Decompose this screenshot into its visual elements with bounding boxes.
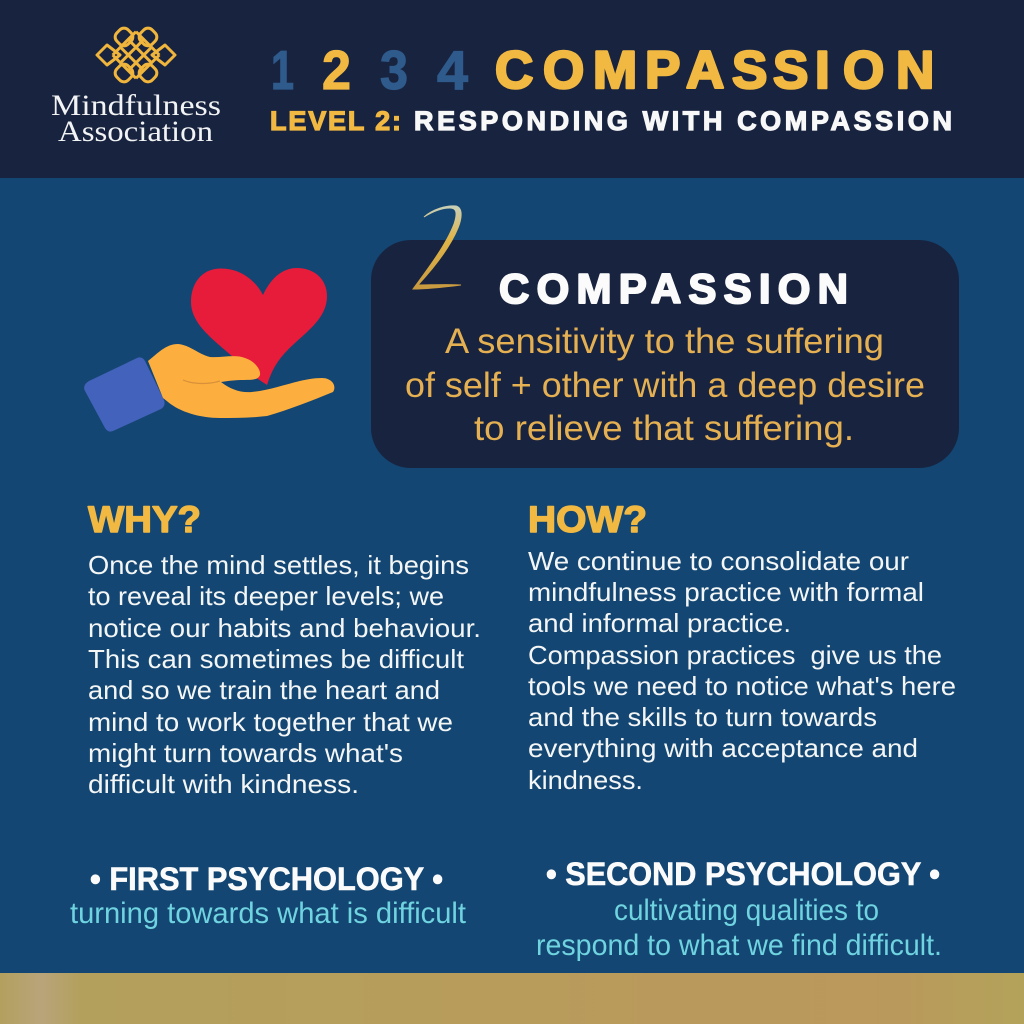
text block: why: notice our habits and behaviour. — [88, 613, 481, 643]
text block: how: and the skills to turn towards — [528, 702, 877, 732]
text block: how: kindness. — [528, 765, 643, 795]
text block: why: might turn towards what's — [88, 738, 403, 768]
text block: how: everything with acceptance and — [528, 733, 918, 763]
level numbers — [271, 39, 468, 101]
bottom band — [0, 973, 1024, 1024]
definition text: to relieve that suffering. — [474, 409, 854, 448]
illustration: hand holding heart — [84, 268, 334, 432]
callout: second psychology: cultivating qualities to — [614, 894, 879, 927]
logo wordmark — [51, 89, 221, 148]
text block: how: mindfulness practice with formal — [528, 577, 924, 607]
definition text: of self + other with a deep desire — [405, 366, 925, 405]
text block: how: and informal practice. — [528, 608, 791, 638]
text block: why: difficult with kindness. — [88, 769, 359, 799]
text block: how: tools we need to notice what's here — [528, 671, 956, 701]
callout: first psychology — [70, 861, 467, 930]
text block: why: Once the mind settles, it begins — [88, 550, 469, 580]
level numbers: 2 — [322, 39, 351, 101]
callout: second psychology: respond to what we find difficult. — [536, 929, 942, 962]
heading: why: WHY? — [88, 499, 201, 540]
callout: first psychology: turning towards what is difficult — [70, 897, 467, 930]
callout: second psychology: • SECOND PSYCHOLOGY • — [546, 856, 940, 892]
icon: script numeral 2 — [413, 206, 461, 289]
definition text: A sensitivity to the suffering — [445, 322, 884, 361]
text block: why: to reveal its deeper levels; we — [88, 581, 444, 611]
text block: how — [528, 546, 956, 795]
level numbers: 4 — [437, 39, 468, 101]
panel: compassion definition — [371, 206, 959, 468]
title: COMPASSION — [495, 41, 934, 100]
icon: open hand — [148, 344, 334, 418]
icon: heart — [191, 268, 327, 385]
level numbers: 1 — [271, 39, 294, 101]
text block: why: mind to work together that we — [88, 707, 453, 737]
level numbers: 3 — [380, 39, 408, 101]
text block: why — [88, 550, 481, 799]
text block: why: and so we train the heart and — [88, 675, 440, 705]
text block: how: We continue to consolidate our — [528, 546, 909, 576]
header band — [0, 0, 1024, 178]
icon: endless knot — [97, 26, 175, 84]
callout: first psychology: • FIRST PSYCHOLOGY • — [90, 861, 443, 897]
logo wordmark: Mindfulness — [51, 89, 221, 122]
text block: why: This can sometimes be difficult — [88, 644, 465, 674]
logo wordmark: Association — [58, 115, 213, 148]
callout: second psychology — [536, 856, 942, 962]
icon: sleeve — [84, 357, 165, 432]
text block: how: Compassion practices give us the — [528, 640, 942, 670]
definition text — [405, 322, 925, 448]
subtitle: RESPONDING WITH COMPASSION — [414, 106, 952, 136]
hand crease — [183, 380, 220, 384]
panel heading: COMPASSION — [499, 265, 848, 312]
subtitle: LEVEL 2: — [270, 106, 401, 136]
logo: Mindfulness Association — [51, 26, 221, 148]
heading: how: HOW? — [528, 499, 647, 540]
